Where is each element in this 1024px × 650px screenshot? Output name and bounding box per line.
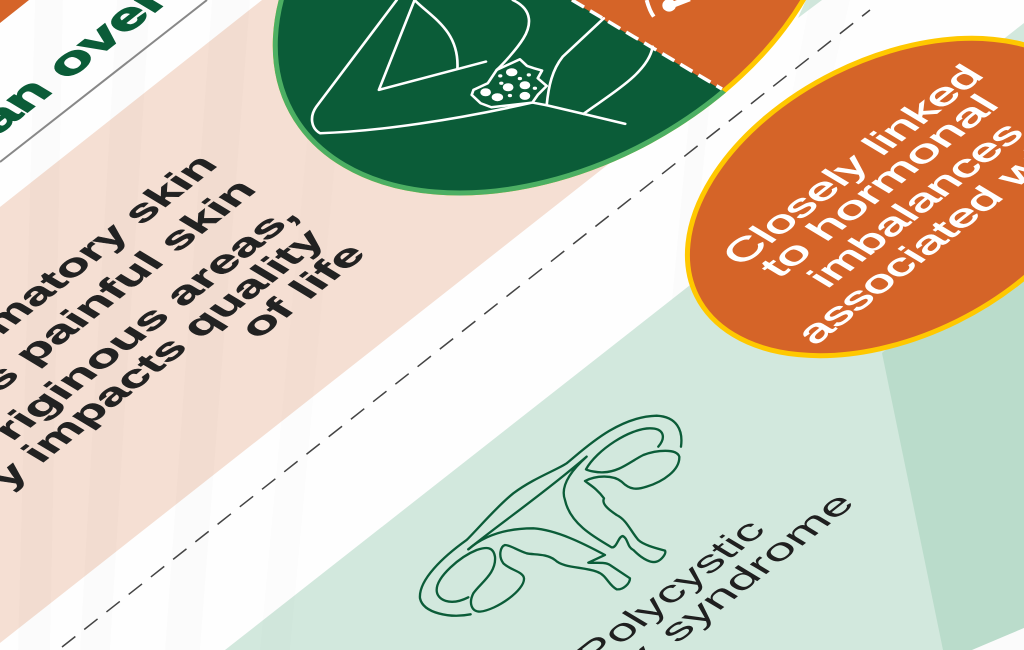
icon: underarm with rash (312, 0, 653, 133)
text block: peach panel description: of life (230, 237, 374, 344)
text block: peach panel description (0, 148, 374, 494)
icon: uterus and ovaries (420, 416, 681, 616)
divider: dashed line (62, 10, 870, 647)
callout text: Closely linked (713, 59, 992, 271)
panel: darker green section (882, 240, 1024, 650)
panel: light green band (225, 23, 1024, 650)
circle: green half with skin icon (272, 0, 726, 196)
corner: orange shape (0, 0, 29, 23)
panel: peach band (0, 0, 620, 643)
callout text: to hormonal (751, 89, 1007, 283)
callout text: imbalances (799, 117, 1024, 293)
callout text: associated with (787, 116, 1024, 350)
circle: orange half with icon (197, 0, 915, 285)
heading rule line (0, 0, 207, 162)
callout: orange oval (635, 0, 1024, 420)
callout text (713, 59, 1024, 350)
label: polycystic ovary syndrome (514, 486, 863, 650)
label: polycystic ovary syndrome: syndrome (649, 486, 863, 648)
